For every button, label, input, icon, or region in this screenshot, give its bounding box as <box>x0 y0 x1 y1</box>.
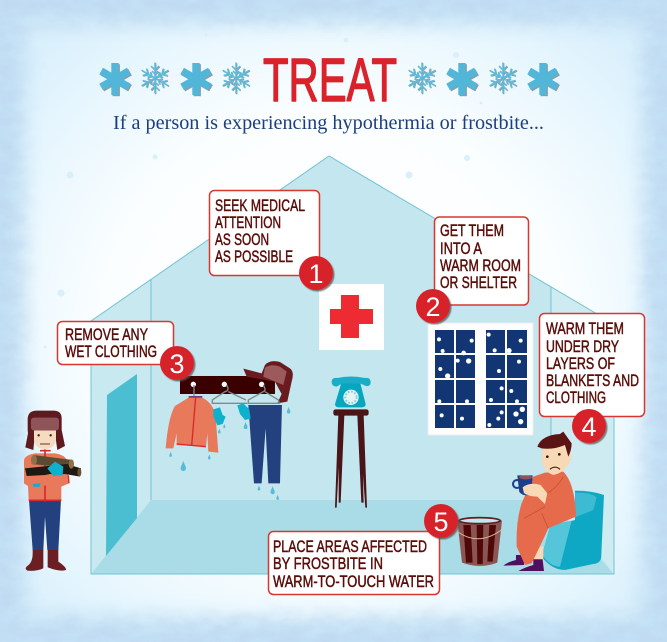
icon: red cross sign <box>319 284 384 350</box>
hat on rack <box>243 361 293 403</box>
number badge 1: 1 <box>308 259 324 289</box>
callout 2: WARM ROOM <box>440 256 521 275</box>
callout 2: OR SHELTER <box>440 273 517 292</box>
number badge 3: 3 <box>169 349 185 379</box>
door <box>106 374 137 556</box>
jacket <box>166 397 218 453</box>
telephone on table <box>332 376 371 508</box>
callout 4: WARM THEM <box>546 319 624 338</box>
house room <box>91 156 614 574</box>
callout 1: AS POSSIBLE <box>215 247 293 266</box>
callout 2 <box>434 217 528 305</box>
window with snow <box>428 323 533 435</box>
bucket <box>457 518 502 566</box>
rack <box>180 376 275 394</box>
callout 5 <box>268 532 440 594</box>
hangers <box>194 385 279 403</box>
callout 5: WARM-TO-TOUCH WATER <box>273 572 434 591</box>
jacket <box>24 453 69 500</box>
legs and feet <box>533 547 543 562</box>
number badge 4: 4 <box>581 412 597 442</box>
callout 2: GET THEM <box>440 221 504 240</box>
robe <box>517 472 576 565</box>
callout 3 <box>58 322 174 364</box>
subtitle: If a person is experiencing hypothermia or frostbite... <box>113 112 544 134</box>
mittens <box>213 403 251 425</box>
person in armchair with mug <box>503 432 604 571</box>
logs <box>32 455 74 468</box>
boots <box>26 549 66 571</box>
number badge 2 <box>416 289 450 323</box>
title: TREAT <box>263 46 397 114</box>
callout 1: SEEK MEDICAL <box>215 196 305 215</box>
callout 1: AS SOON <box>215 230 269 249</box>
number badge 4 <box>572 409 606 443</box>
callout 2: INTO A <box>440 239 482 258</box>
armchair <box>542 491 604 570</box>
head and hair <box>542 443 572 475</box>
callout 3: REMOVE ANY <box>65 325 148 344</box>
number badge 2: 2 <box>425 292 441 322</box>
callout 4 <box>540 314 644 416</box>
number badge 5: 5 <box>433 507 449 537</box>
pants <box>248 405 282 483</box>
callout 5: BY FROSTBITE IN <box>273 554 383 573</box>
person with logs <box>24 411 81 571</box>
number badge 1 <box>299 256 333 290</box>
arm and mitten <box>24 474 69 487</box>
trousers <box>29 500 61 550</box>
mug and hands <box>517 475 533 495</box>
water drops <box>169 407 290 500</box>
callout 3: WET CLOTHING <box>65 342 157 361</box>
wet clothing on rack <box>166 361 293 500</box>
callout 4: UNDER DRY <box>546 337 619 356</box>
number badge 5 <box>424 504 458 538</box>
callout 1 <box>210 190 320 276</box>
callout 4: CLOTHING <box>546 388 606 407</box>
title row of snowflakes <box>99 62 560 96</box>
callout 1: ATTENTION <box>215 213 281 232</box>
hat and head <box>25 411 65 450</box>
callout 4: LAYERS OF <box>546 354 615 373</box>
number badge 3 <box>160 346 194 380</box>
callout 5: PLACE AREAS AFFECTED <box>273 537 427 556</box>
